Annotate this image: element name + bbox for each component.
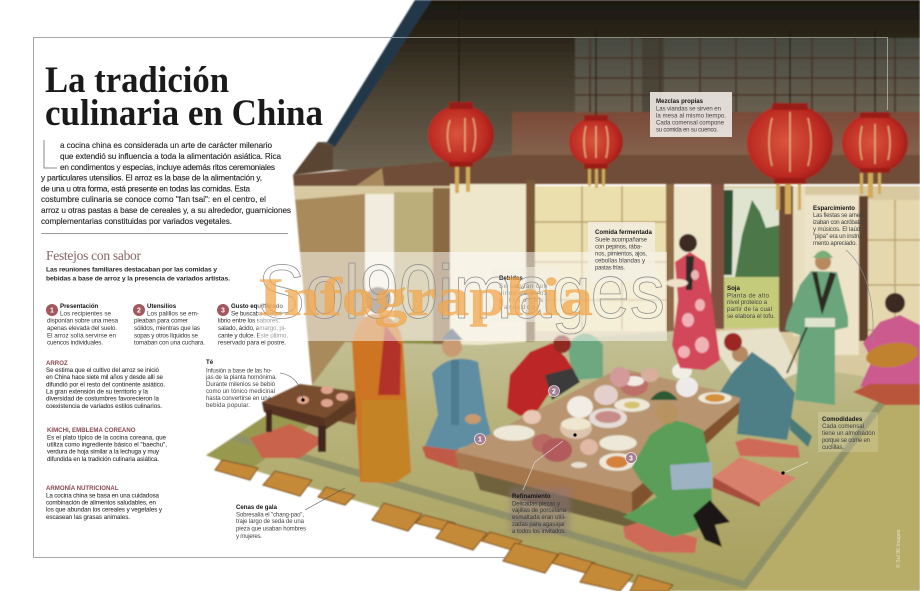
step 2: utensilios: sólidos, mientras que las	[134, 325, 200, 332]
woman with lute in pink	[853, 293, 920, 405]
note: kimchi: difundida en la tradición culinaria asiática.	[47, 456, 159, 463]
label box: comida fermentada: con pepinos, rába-	[595, 244, 642, 250]
step 1: presentación	[46, 303, 118, 346]
label: té: como un tónico medicinal	[206, 388, 275, 395]
stepping planks	[215, 460, 673, 591]
step 2: utensilios	[133, 303, 205, 346]
note: arroz: difundió por el resto del continente asiático.	[46, 382, 165, 388]
step 2: utensilios: 2	[137, 308, 141, 314]
label: cenas de gala: Sobresalía el "chang-pao",	[236, 512, 304, 518]
illustration: traditional Chinese banquet room	[206, 0, 920, 591]
label box: comida fermentada: Suele acompañarse	[595, 236, 648, 244]
step 1: presentación: cuencos individuales.	[47, 340, 103, 346]
label box: bebidas: Se servían con	[499, 283, 547, 290]
label: soja	[727, 285, 775, 320]
label: comodidades: Comodidades	[822, 416, 863, 423]
credit: © Sol 90 Images	[895, 529, 902, 568]
step 3: gusto equilibrado: cante y dulce. Este último,	[218, 332, 288, 340]
label box: bebidas	[492, 267, 560, 322]
label: té: Té	[206, 359, 214, 366]
label: comodidades: tiene un almohadón	[822, 430, 875, 437]
label box: mezclas propias: Mezclas propias	[656, 98, 704, 105]
note: arroz	[46, 360, 165, 410]
label: té: jas de la planta homónima.	[205, 374, 277, 381]
note: kimchi: Es el plato típico de la cocina coreana, que	[47, 434, 167, 442]
label: esparcimiento: izaban con acróbatas	[813, 219, 865, 226]
label box: bebidas: Bebidas	[499, 275, 523, 282]
note: armonía nutricional	[46, 484, 163, 521]
number badge 2 scene: 2	[552, 388, 556, 396]
watermark: Sol90images	[258, 250, 665, 335]
title: La tradición	[45, 60, 229, 101]
step 3: gusto equilibrado: Se buscaba el equi-	[231, 310, 283, 318]
step 1: presentación: disponían sobre una mesa	[47, 318, 118, 324]
label box: comida fermentada: nos, pimientos, ajos,	[595, 250, 647, 258]
dishes on the table	[493, 363, 732, 471]
label box: comida fermentada: pastas frías.	[595, 264, 625, 272]
watermark: Infographia	[258, 267, 593, 327]
step 3: gusto equilibrado: salado, ácido, amargo, pi-	[218, 325, 286, 332]
label box: comida fermentada	[588, 222, 655, 282]
step 1: presentación: apenas elevada del suelo.	[47, 325, 117, 332]
label box: mezclas propias	[650, 92, 732, 137]
title: culinaria en China	[45, 93, 323, 134]
introduction text: a cocina china es considerada un arte de carácter milenario	[60, 141, 272, 150]
introduction text: arroz u otras pastas a base de cereales y, a su alrededor, guarniciones	[41, 206, 291, 215]
label box: bebidas: vinos de arroz	[499, 290, 547, 297]
section heading: Festejos con sabor	[46, 248, 142, 263]
label: comodidades: Cada comensal	[822, 423, 864, 430]
label box: mezclas propias: Las viandas se sirven en	[656, 106, 721, 112]
introduction text: en condimentos y especias, incluye además ritos ceremoniales	[60, 163, 275, 172]
number badge 1 scene	[474, 434, 486, 444]
label: comodidades	[781, 412, 878, 475]
note: kimchi: verdura de hoja similar a la lechuga y muy	[47, 448, 160, 456]
step 3: gusto equilibrado: reservado para el postre.	[218, 340, 286, 346]
note: armonía nutricional: escasean las grasas animales.	[46, 514, 130, 521]
label: esparcimiento	[813, 205, 873, 342]
label: esparcimiento: "pipa" era un instru-	[813, 233, 863, 240]
divider	[41, 233, 288, 234]
note: arroz: Se estima que el cultivo del arroz se inició	[46, 367, 160, 374]
label box: mezclas propias: su comida en su cuenco.	[656, 126, 718, 134]
label: cenas de gala: pieza que usaban hombres	[236, 526, 306, 532]
tatami floor	[254, 328, 879, 591]
step 3: gusto equilibrado: Gusto equilibrado	[231, 303, 283, 310]
label: té	[205, 359, 305, 409]
label: soja: Soja	[727, 285, 740, 292]
roof edge	[327, 0, 432, 147]
kneeling man in teal robe	[720, 333, 812, 447]
step 1: presentación: El arroz solía servirse en	[47, 332, 116, 340]
label: refinamiento: a todos los invitados.	[512, 528, 566, 535]
label: té: bebida popular.	[206, 402, 250, 409]
room walls and ceiling	[206, 0, 920, 591]
low banquet table	[455, 368, 745, 530]
number badge 3 scene: 3	[629, 456, 633, 462]
number badge 1 scene: 1	[478, 436, 482, 444]
introduction text: costumbre culinaria se conoce como "fan tsai": en el centro, el	[41, 195, 266, 204]
section intro: bebidas a base de arroz y la presencia de variados artistas.	[46, 276, 230, 282]
note: armonía nutricional: combinación de alimentos saludables, en	[46, 500, 157, 506]
introduction text: que extendió su influencia a toda la alimentación asiática. Rica	[60, 152, 281, 161]
label: cenas de gala: y mujeres.	[236, 533, 262, 540]
note: arroz: ARROZ	[46, 360, 68, 367]
lanterns	[428, 0, 908, 214]
step 3: gusto equilibrado: 3	[221, 308, 225, 314]
note: kimchi: KIMCHI, EMBLEMA COREANO	[47, 427, 136, 434]
note: arroz: diversidad de costumbres favorecieron la	[46, 396, 160, 402]
label: refinamiento: esmaltada eran utili-	[512, 514, 566, 521]
label: cenas de gala: Cenas de gala	[236, 504, 278, 511]
step 2: utensilios: Utensilios	[147, 303, 177, 310]
drop cap L	[44, 140, 57, 168]
step 1: presentación: Presentación	[60, 303, 99, 310]
step 2: utensilios: sopas y otros líquidos se	[134, 332, 198, 340]
introduction text: de una u otra forma, está presente en todas las comidas. Esta	[41, 184, 250, 194]
note: armonía nutricional: La cocina china se basa en una cuidadosa	[46, 492, 160, 500]
note: kimchi	[47, 427, 167, 463]
shoji screen left	[535, 186, 666, 331]
standing woman in red and gold robe	[352, 287, 411, 483]
label: comodidades: cuclillas.	[822, 444, 844, 451]
note: arroz: coexistencia de variados estilos culinarios.	[46, 403, 162, 410]
introduction text: complementarias constituidas por variados vegetales.	[41, 217, 232, 226]
label: soja: se elabora el tofu.	[727, 313, 775, 320]
seated man in blue robe	[425, 328, 492, 450]
label: té: Durante milenios se bebió	[206, 381, 276, 388]
pillows	[623, 438, 800, 553]
number badge 2 scene	[548, 386, 560, 396]
label: refinamiento: Delicadas piezas y	[512, 500, 561, 508]
label: comodidades: porque se come en	[822, 437, 870, 444]
label: esparcimiento: Esparcimiento	[813, 205, 855, 212]
step 1: presentación: 1	[50, 308, 54, 314]
upper lattice window	[575, 38, 920, 112]
label: cenas de gala: traje largo de seda de una	[236, 518, 305, 525]
label: soja: nivel proteico a	[727, 299, 768, 306]
tatami border	[230, 403, 882, 585]
standing woman in pink floral robe	[666, 234, 720, 370]
introduction text: y particulares utensilios. El arroz es la base de la alimentación y,	[41, 174, 262, 182]
label box: mezclas propias: la mesa al mismo tiempo.	[656, 112, 726, 120]
label: esparcimiento: y músicos. El laúd o	[813, 226, 866, 233]
section intro: Las reuniones familiares destacaban por las comidas y	[46, 266, 217, 274]
title	[45, 60, 323, 134]
wall post	[779, 186, 793, 332]
frame on illustration	[392, 38, 888, 110]
label: cenas de gala	[236, 488, 345, 540]
step 3: gusto equilibrado: librio entre los sabores:	[218, 318, 280, 324]
foreground man in green robe	[623, 391, 730, 547]
step 2: utensilios: tomaban con una cuchara.	[134, 340, 205, 346]
step 3: gusto equilibrado	[217, 303, 288, 346]
step 1: presentación: Los recipientes se	[60, 310, 111, 318]
label: refinamiento: Refinamiento	[512, 493, 551, 500]
step 2: utensilios: pleaban para comer	[134, 318, 188, 324]
label box: comida fermentada: cebollas blandas y	[595, 258, 646, 264]
shaded block behind refinamiento	[510, 488, 570, 534]
step 2: utensilios: Los palillos se em-	[147, 310, 199, 318]
number badge 3 scene	[626, 452, 636, 464]
pillow under blue man	[422, 441, 478, 470]
note: arroz: La gran extensión de su territorio y la	[46, 388, 149, 396]
lower wall panels	[293, 186, 920, 376]
introduction text	[41, 141, 291, 226]
label box: bebidas: variados.	[499, 304, 539, 311]
label: esparcimiento: Las fiestas se amen-	[813, 212, 865, 219]
translucent watermark band	[258, 252, 667, 341]
standing man in green robe	[785, 250, 848, 405]
man in red robe	[507, 335, 580, 416]
section intro	[46, 266, 230, 282]
garden view	[723, 188, 780, 278]
label: esparcimiento: mento apreciado.	[813, 240, 857, 247]
note: armonía nutricional: ARMONÍA NUTRICIONAL	[46, 484, 119, 492]
tea table and pillow	[250, 384, 360, 458]
note: armonía nutricional: los que abundan los cereales y vegetales y	[46, 506, 163, 514]
note: kimchi: utiliza como ingrediente básico el "baechu",	[47, 442, 167, 448]
label box: bebidas: y licores	[499, 297, 543, 304]
label: té: Infusión a base de las ho-	[206, 368, 272, 374]
label: refinamiento: vajillas de porcelana	[512, 507, 567, 514]
label: soja: Planta de alto	[727, 292, 770, 300]
label: soja: partir de la cual	[727, 306, 772, 313]
label: refinamiento: zadas para agasajar	[512, 521, 565, 528]
man in green behind table	[568, 334, 603, 380]
label box: comida fermentada: Comida fermentada	[595, 229, 652, 236]
label: refinamiento	[512, 433, 577, 535]
label box: mezclas propias: Cada comensal compone	[656, 120, 725, 126]
label: té: hasta convertirse en una	[206, 395, 272, 402]
frame line	[34, 38, 505, 558]
note: arroz: en China hace siete mil años y desde allí se	[46, 374, 164, 381]
